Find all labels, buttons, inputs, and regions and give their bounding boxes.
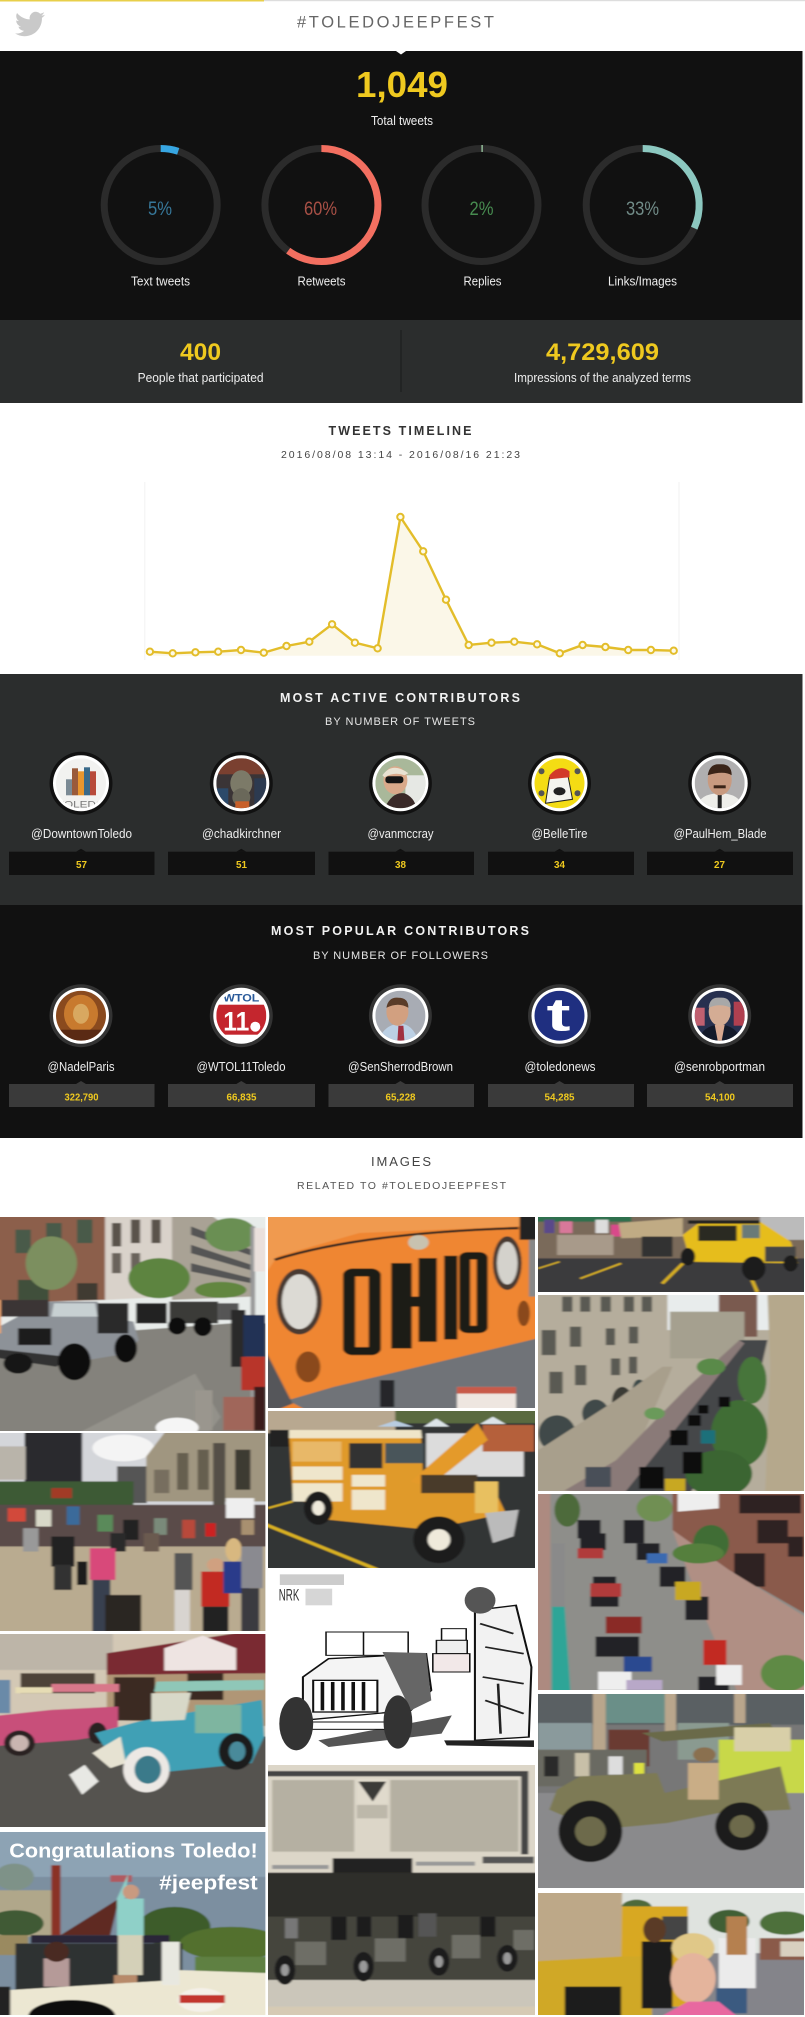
photo: girl by yellow jeep [538, 1893, 804, 2015]
photo: orange willys wagon [268, 1411, 535, 1568]
photo: vintage newspaper with jeeps [268, 1765, 535, 2015]
photo: crowd on plaza [0, 1433, 266, 1631]
contributor: chadkirchner: @chadkirchner [202, 826, 282, 841]
photo: aerial parade street [538, 1295, 804, 1491]
contributor: WTOL11Toledo: 11 [223, 1007, 249, 1037]
donut: replies 2%: 2% [470, 199, 494, 220]
popular subheading: BY NUMBER OF FOLLOWERS [313, 950, 488, 962]
popular heading: MOST POPULAR CONTRIBUTORS [271, 924, 529, 938]
panel: participants and impressions [0, 320, 802, 403]
contributor: SenSherrodBrown: @SenSherrodBrown [348, 1059, 453, 1074]
contributor: vanmccray [328, 752, 474, 875]
contributor: toledonews: t [546, 989, 570, 1041]
donut: links and images 33%: 33% [626, 199, 659, 220]
contributor: SenSherrodBrown [328, 984, 474, 1107]
contributor: PaulHem_Blade: 27 [714, 859, 725, 871]
contributor: NadelParis: 322,790 [64, 1092, 99, 1104]
contributor: BelleTire [488, 752, 634, 875]
photo caption text [9, 1839, 258, 1894]
contributor: DowntownToledo: 57 [76, 859, 87, 871]
photo: congratulations toledo jeepfest [0, 1832, 266, 2015]
contributor: chadkirchner: 51 [236, 859, 247, 871]
contributor: NadelParis [9, 984, 154, 1107]
contributor: SenSherrodBrown: 65,228 [386, 1092, 416, 1104]
contributor: senrobportman: @senrobportman [674, 1059, 765, 1074]
contributor: toledonews: 54,285 [544, 1092, 575, 1104]
contributor: BelleTire: 34 [554, 859, 565, 871]
photo grid [0, 1210, 805, 2017]
donut: replies 2%: Replies [464, 274, 502, 288]
photo: yellow jeep at vendor stalls [538, 1217, 804, 1292]
donut: links and images 33% [586, 148, 699, 288]
active subheading: BY NUMBER OF TWEETS [325, 716, 475, 728]
title: #TOLEDOJEEPFEST [297, 14, 494, 32]
images subheading: RELATED TO #TOLEDOJEEPFEST [297, 1180, 507, 1192]
icon: twitter bird [15, 12, 45, 36]
photo: aerial jeeps and crowd [538, 1494, 804, 1690]
contributor: WTOL11Toledo: 66,835 [226, 1092, 257, 1104]
photo: orange ohio jeep grille [268, 1217, 535, 1408]
donut: replies 2% [425, 148, 538, 288]
donut: links and images 33%: Links/Images [608, 274, 677, 288]
contributor: NadelParis: @NadelParis [48, 1059, 115, 1074]
contributor: PaulHem_Blade [647, 752, 793, 875]
contributor: WTOL11Toledo [168, 984, 315, 1107]
panel: most active contributors [0, 674, 802, 905]
contributor: BelleTire: @BelleTire [532, 826, 588, 841]
participants label: People that participated [138, 370, 264, 385]
participants number: 400 [180, 339, 221, 366]
contributor: vanmccray: 38 [395, 859, 406, 871]
timeline heading: TWEETS TIMELINE [328, 424, 472, 438]
contributor: chadkirchner [168, 752, 315, 875]
total tweets label: Total tweets [371, 113, 433, 128]
contributor: DowntownToledo [9, 752, 154, 875]
photo: jeep birthday cartoon: NRK [279, 1585, 300, 1604]
images heading: IMAGES [371, 1154, 431, 1169]
donut: retweets 60% [265, 148, 378, 288]
donut: text tweets 5%: 5% [148, 199, 172, 220]
impressions number: 4,729,609 [546, 339, 659, 366]
photo: pink and teal surrey jeeps [0, 1634, 266, 1827]
active heading: MOST ACTIVE CONTRIBUTORS [280, 691, 520, 705]
contributor: WTOL11Toledo: @WTOL11Toledo [196, 1059, 286, 1074]
contributor: DowntownToledo: TOLEDO [57, 799, 105, 809]
contributor: senrobportman: 54,100 [705, 1092, 735, 1104]
photo: olive military jeep [538, 1694, 804, 1888]
donut: retweets 60%: Retweets [298, 274, 346, 288]
photo: silver jeep on parade street [0, 1217, 266, 1431]
impressions label: Impressions of the analyzed terms [514, 370, 691, 385]
contributor: WTOL11Toledo: WTOL [223, 993, 260, 1005]
contributor: toledonews: @toledonews [524, 1059, 596, 1074]
header bar [0, 0, 805, 51]
contributor: DowntownToledo: @DowntownToledo [31, 826, 132, 841]
panel: most popular contributors [0, 905, 802, 1138]
contributor: toledonews [488, 984, 634, 1107]
panel: total tweets [0, 51, 802, 320]
contributor: PaulHem_Blade: @PaulHem_Blade [674, 826, 766, 841]
line chart: tweets over time [145, 482, 679, 660]
photo: jeep birthday cartoon [279, 1574, 534, 1750]
donut: text tweets 5% [104, 148, 217, 288]
panel: tweets timeline [145, 424, 679, 660]
timeline date range: 2016/08/08 13:14 - 2016/08/16 21:23 [281, 449, 520, 461]
donut: retweets 60%: 60% [304, 199, 337, 220]
contributor: vanmccray: @vanmccray [368, 826, 434, 841]
donut: text tweets 5%: Text tweets [131, 274, 190, 288]
total tweets number: 1,049 [356, 64, 448, 105]
contributor: senrobportman [647, 984, 793, 1107]
